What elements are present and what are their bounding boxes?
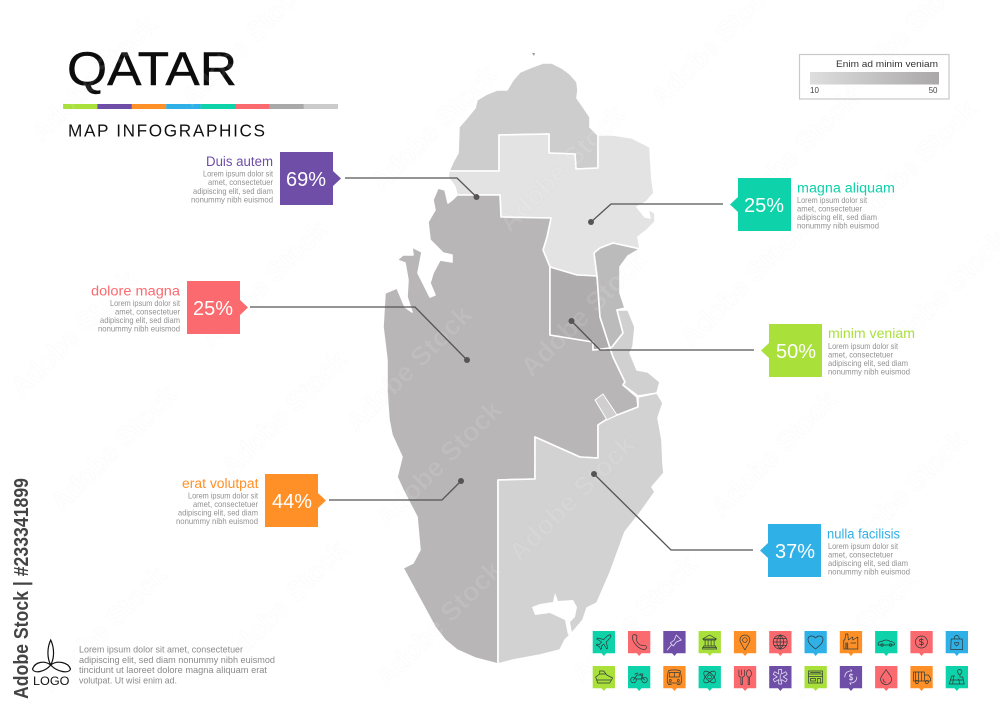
logo: [32, 640, 70, 688]
icon grid: [593, 631, 968, 691]
callout: nulla facilisis 37%: [591, 471, 910, 577]
callout: Duis autem 69%: 69%: [286, 168, 326, 191]
callout: erat volutpat 44%: erat volutpat: [182, 476, 259, 491]
small enclave: [595, 394, 617, 420]
icon: car: [875, 631, 897, 656]
callout: erat volutpat 44%: nonummy nibh euismod: [176, 516, 258, 526]
icon: factory: [840, 631, 862, 656]
islet: [532, 53, 535, 56]
callout: Duis autem 69%: Lorem ipsum dolor sit: [203, 169, 274, 179]
footer description: Lorem ipsum dolor sit amet, consectetuer: [79, 644, 243, 656]
callout: minim veniam 50%: amet, consectetuer: [828, 350, 893, 360]
callout: Duis autem 69%: nonummy nibh euismod: [191, 194, 273, 204]
subtitle: MAP INFOGRAPHICS: [68, 120, 265, 140]
callout: nulla facilisis 37%: nulla facilisis: [827, 526, 900, 542]
callout: dolore magna 25%: Lorem ipsum dolor sit: [110, 298, 181, 308]
icon: pin: [663, 631, 686, 656]
text: Adobe Stock: [725, 84, 863, 223]
icon: location: [734, 631, 756, 656]
icon: bank: [699, 631, 721, 656]
text: Adobe Stock: [503, 429, 641, 568]
callout: dolore magna 25%: amet, consectetuer: [115, 306, 180, 316]
text: Adobe Stock: [340, 299, 478, 438]
icon: dollar refresh: [840, 666, 862, 691]
text: Adobe Stock: [45, 379, 183, 518]
footer description: tincidunt ut laoreet dolore magna aliquam erat: [79, 665, 267, 676]
callout: dolore magna 25%: dolore magna: [91, 284, 181, 298]
icon: truck: [910, 666, 933, 691]
text: Adobe Stock: [675, 214, 813, 353]
legend minimum: 10: [810, 86, 819, 95]
icon: phone: [628, 631, 650, 656]
callout: minim veniam 50%: nonummy nibh euismod: [828, 366, 910, 376]
callout: magna aliquam 25%: amet, consectetuer: [797, 204, 862, 214]
callout: erat volutpat 44%: [176, 474, 464, 527]
callout: nulla facilisis 37%: adipiscing elit, sed diam: [828, 558, 908, 568]
callout: erat volutpat 44%: 44%: [272, 490, 312, 513]
map of Qatar: [383, 53, 664, 664]
inlet: [532, 593, 577, 635]
icon: bag: [946, 631, 968, 656]
footer description: [79, 644, 275, 686]
callout: dolore magna 25%: adipiscing elit, sed diam: [100, 315, 180, 325]
text: Adobe Stock: [365, 59, 503, 198]
legend gradient: [810, 72, 939, 84]
text: Adobe Stock: [35, 559, 173, 698]
region: doha coast: [610, 310, 660, 396]
text: Adobe Stock: [215, 344, 353, 483]
callout: erat volutpat 44%: amet, consectetuer: [193, 499, 258, 509]
text: Adobe Stock: [370, 554, 508, 693]
icon: ship: [593, 666, 615, 691]
callout: magna aliquam 25%: magna aliquam: [797, 180, 895, 196]
callout: minim veniam 50%: 50%: [776, 340, 816, 363]
callout: minim veniam 50%: Lorem ipsum dolor sit: [828, 341, 899, 351]
icon: drop: [875, 666, 897, 691]
icon: globe: [769, 631, 792, 656]
text: Adobe Stock: [195, 214, 333, 353]
icon: map: [946, 666, 968, 691]
footer description: adipiscing elit, sed diam nonummy nibh euismod: [79, 655, 275, 666]
text: Adobe Stock: [493, 99, 631, 238]
callout: magna aliquam 25%: 25%: [744, 194, 784, 217]
legend maximum: 50: [929, 86, 938, 95]
callout: magna aliquam 25%: [588, 178, 895, 231]
callout: minim veniam 50%: minim veniam: [828, 326, 915, 341]
text: Adobe Stock: [845, 94, 983, 233]
callout: magna aliquam 25%: nonummy nibh euismod: [797, 220, 879, 230]
callout: Duis autem 69%: [191, 152, 480, 205]
callout: nulla facilisis 37%: amet, consectetuer: [828, 550, 893, 560]
callout: dolore magna 25%: [91, 281, 470, 363]
region: south east: [498, 393, 664, 664]
callout: nulla facilisis 37%: nonummy nibh euismod: [828, 566, 910, 576]
icon: medical star: [769, 666, 792, 691]
icon: dollar: [910, 631, 933, 656]
callout: dolore magna 25%: 25%: [193, 297, 233, 320]
icon: atom: [699, 666, 721, 691]
callout: magna aliquam 25%: Lorem ipsum dolor sit: [797, 195, 868, 205]
text: Adobe Stock: [785, 564, 923, 703]
callout: dolore magna 25%: nonummy nibh euismod: [98, 324, 180, 334]
icon: fork and spoon: [734, 666, 756, 691]
region: north: [449, 63, 598, 171]
callout: Duis autem 69%: amet, consectetuer: [208, 177, 273, 187]
legend: [800, 54, 949, 99]
callout: nulla facilisis 37%: Lorem ipsum dolor sit: [828, 541, 899, 551]
icon: motorbike: [628, 666, 650, 691]
text: Adobe Stock: [515, 244, 653, 383]
text: Adobe Stock: [565, 549, 703, 688]
callout: magna aliquam 25%: adipiscing elit, sed diam: [797, 212, 877, 222]
callout: erat volutpat 44%: adipiscing elit, sed diam: [178, 508, 258, 518]
text: Adobe Stock: [705, 384, 843, 523]
icon: plane: [593, 631, 615, 656]
callout: minim veniam 50%: adipiscing elit, sed diam: [828, 358, 908, 368]
callout: nulla facilisis 37%: 37%: [775, 540, 815, 563]
legend title: Enim ad minim veniam: [836, 59, 938, 70]
title: QATAR: [67, 43, 237, 96]
colour strip: [63, 104, 338, 109]
icon: shop: [804, 666, 827, 691]
text: Adobe Stock: [215, 534, 353, 673]
region: east central: [448, 134, 655, 276]
callout: Duis autem 69%: adipiscing elit, sed diam: [193, 186, 273, 196]
icon: heart: [804, 631, 827, 656]
logo: LOGO: [33, 676, 70, 688]
region: east coast: [594, 243, 640, 348]
text: Adobe Stock: [25, 9, 163, 148]
callout: Duis autem 69%: Duis autem: [206, 154, 273, 169]
text: Adobe Stock: [5, 264, 143, 403]
callout: minim veniam 50%: [568, 318, 915, 377]
footer description: volutpat. Ut wisi enim ad.: [79, 676, 177, 686]
text: Adobe Stock: [370, 394, 508, 533]
stock id side text: Adobe Stock | #233341899: [11, 478, 33, 699]
icon: bus: [663, 666, 686, 691]
text: Adobe Stock: [835, 424, 973, 563]
region: west: [383, 188, 638, 664]
callout: erat volutpat 44%: Lorem ipsum dolor sit: [188, 490, 259, 500]
region: central dark: [550, 267, 610, 350]
